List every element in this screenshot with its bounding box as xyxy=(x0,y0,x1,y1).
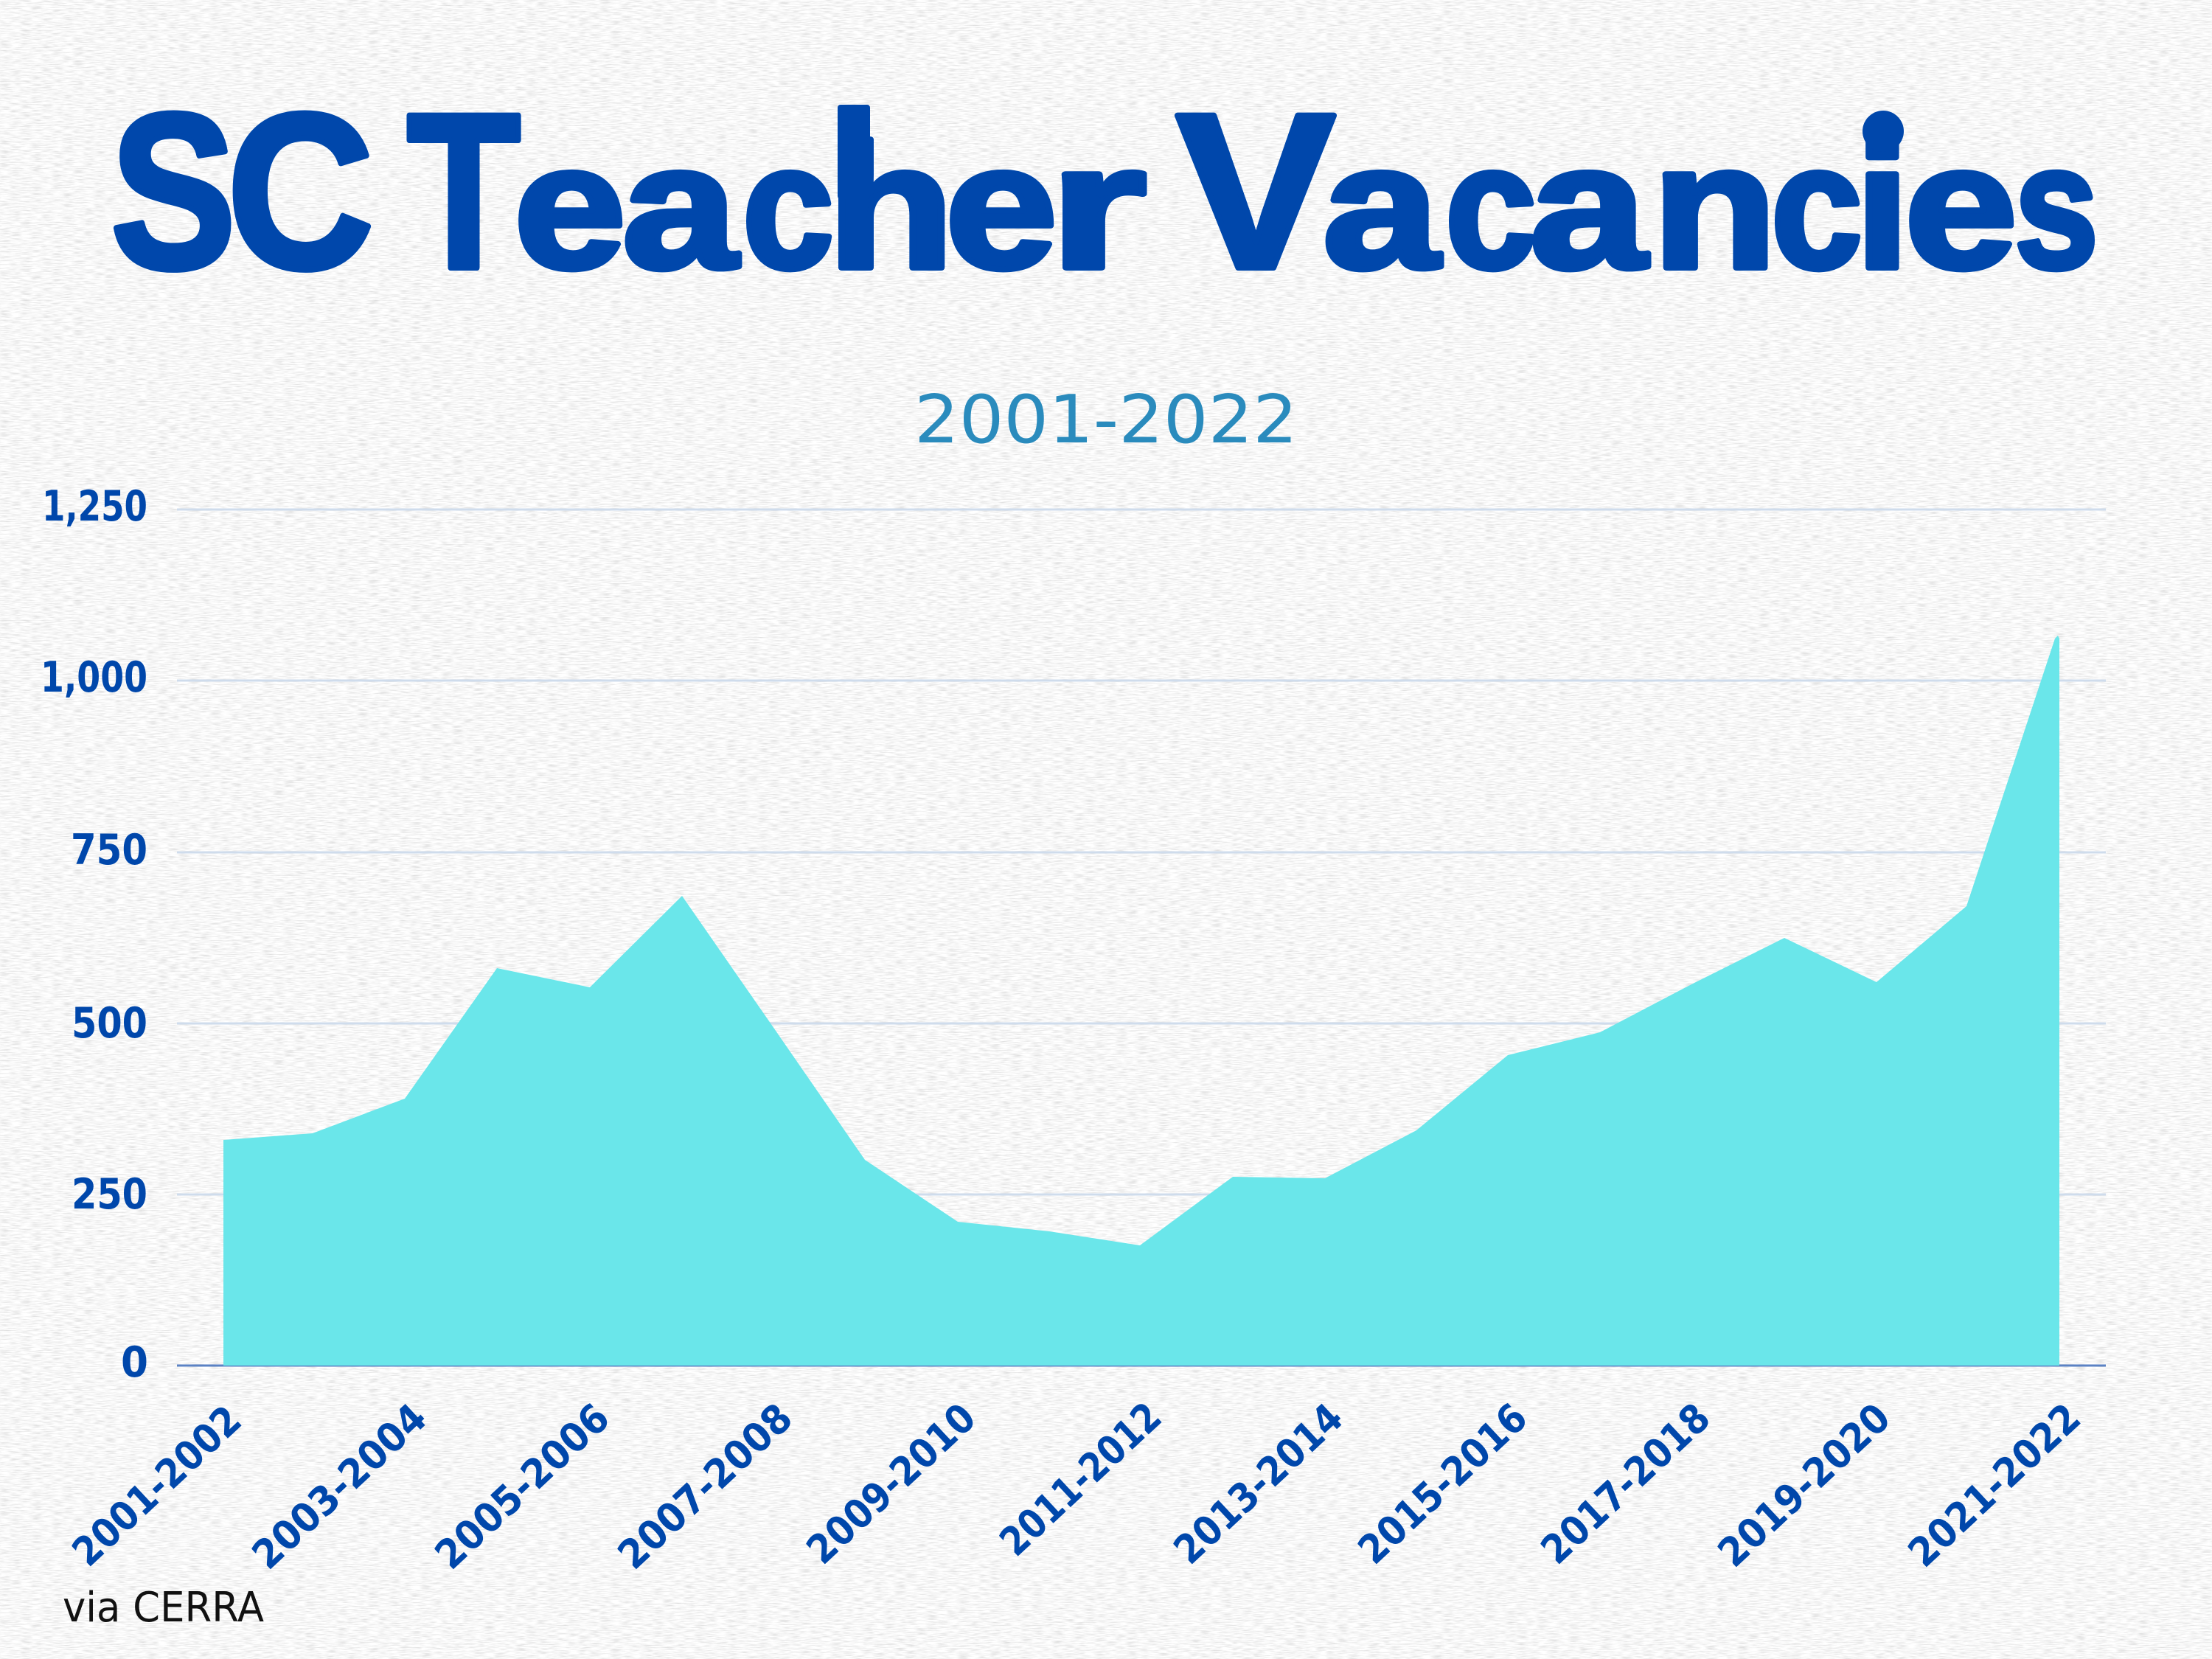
gridlines xyxy=(177,509,2106,1194)
x axis labels: 2009-2010 xyxy=(798,1394,984,1573)
title: c xyxy=(1445,108,1537,305)
x axis line xyxy=(177,1364,2106,1367)
x axis labels: 2007-2008 xyxy=(609,1394,801,1579)
title: T xyxy=(407,67,521,315)
area series xyxy=(223,636,2059,1366)
title: e xyxy=(1905,108,2017,305)
y axis labels: 500 xyxy=(72,999,147,1048)
y axis labels: 1,000 xyxy=(41,653,147,702)
chart: teacher vacancies area chart xyxy=(41,482,2106,1579)
x axis labels xyxy=(63,1394,2090,1579)
title: i xyxy=(1855,108,1910,305)
y axis labels: 1,250 xyxy=(42,482,147,531)
title: e xyxy=(945,108,1057,305)
title: a xyxy=(1323,108,1441,305)
title: n xyxy=(1652,108,1777,305)
y axis labels: 0 xyxy=(121,1338,148,1387)
title: c xyxy=(1771,108,1863,305)
title: a xyxy=(622,108,739,305)
title: V xyxy=(1176,67,1337,315)
x axis labels: 2003-2004 xyxy=(243,1394,436,1579)
x axis labels: 2019-2020 xyxy=(1709,1394,1899,1576)
title: h xyxy=(827,108,954,305)
y axis labels: 250 xyxy=(72,1170,147,1219)
source credit: via CERRA xyxy=(63,1584,264,1632)
x axis labels: 2011-2012 xyxy=(991,1394,1170,1565)
title: C xyxy=(227,67,374,315)
title: S xyxy=(111,67,236,315)
x axis labels: 2015-2016 xyxy=(1349,1394,1536,1573)
x axis labels: 2001-2002 xyxy=(63,1397,250,1576)
title: c xyxy=(742,108,834,305)
x axis labels: 2017-2018 xyxy=(1532,1394,1719,1573)
subtitle: year range: 2001-2022 xyxy=(914,381,1298,459)
x axis labels: 2021-2022 xyxy=(1899,1394,2090,1576)
title xyxy=(111,67,2098,315)
title: a xyxy=(1530,108,1648,305)
x axis labels: 2013-2014 xyxy=(1165,1394,1352,1573)
x axis labels: 2005-2006 xyxy=(426,1394,619,1579)
y axis labels xyxy=(41,482,148,1387)
title: s xyxy=(2014,108,2098,305)
y axis labels: 750 xyxy=(71,826,147,874)
title: e xyxy=(514,108,626,305)
title: r xyxy=(1049,108,1147,305)
